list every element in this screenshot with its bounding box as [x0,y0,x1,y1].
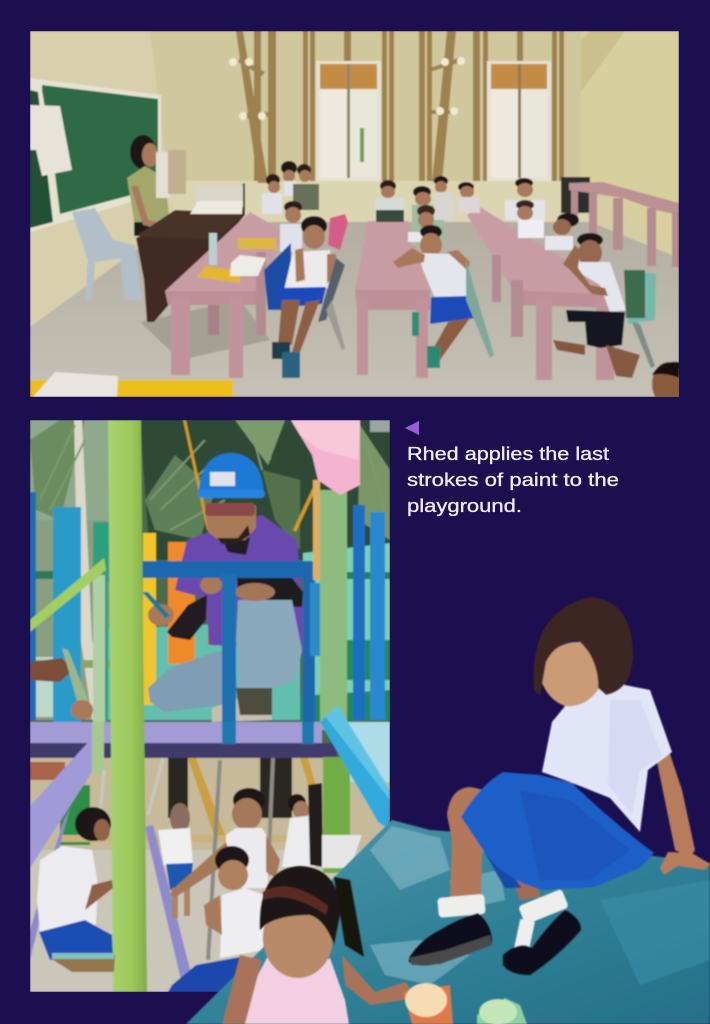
far arm and hand [657,748,710,875]
caption text: Rhed applies the last [407,443,609,464]
chalky streaks on the slab [370,826,505,985]
sitting girl in school uniform [409,597,710,975]
little girl in pink dress with cup [222,866,412,1024]
windows [316,61,551,181]
front boy right [553,233,656,378]
face and hair [533,597,633,706]
blackboard [30,78,161,232]
head at lower right corner [651,360,679,397]
teal building and green bands [36,543,390,722]
photo: classroom with pupils and teacher [30,31,684,406]
yellow folder and open book [30,372,233,397]
blue slide and right green pole [320,706,390,873]
arms [222,955,412,1024]
photo: man painting the playground [30,420,390,992]
right pink desk [467,207,619,380]
teacher desk and papers [136,150,245,322]
lime central pole [108,420,147,992]
middle pink desk [355,221,430,378]
bamboo columns [229,31,564,183]
painter in blue hard hat and purple shirt [142,453,304,722]
pink dress [245,948,349,1024]
hand with paintbrush at left edge [30,648,93,720]
swing frame legs [30,738,273,980]
blue railing [142,560,321,723]
orange and green toy cups [403,983,527,1024]
teal slide slab foreground [186,820,710,1024]
front boy left [272,216,345,378]
caption text [407,443,619,516]
head with hair and ponytail [260,866,364,978]
caption pointer triangle [405,421,419,435]
caption text: strokes of paint to the [407,469,619,490]
white blouse [542,680,672,832]
pupils on the swings [37,783,362,992]
white socks [437,889,569,951]
left pink desk [165,212,285,378]
blue skirt [461,772,654,890]
right poles and pink flag [291,420,385,730]
back row pupils [262,161,579,310]
front boy centre [393,225,494,368]
playground platform [30,722,337,774]
area beneath platform: school building and gravel [30,758,390,992]
legs [447,787,540,900]
palm trees background [30,420,390,720]
back right tables and bin [561,177,679,267]
teacher and chair [72,135,170,300]
black shoes [409,910,581,975]
coloured poles [30,491,211,723]
caption text: playground. [407,495,522,516]
